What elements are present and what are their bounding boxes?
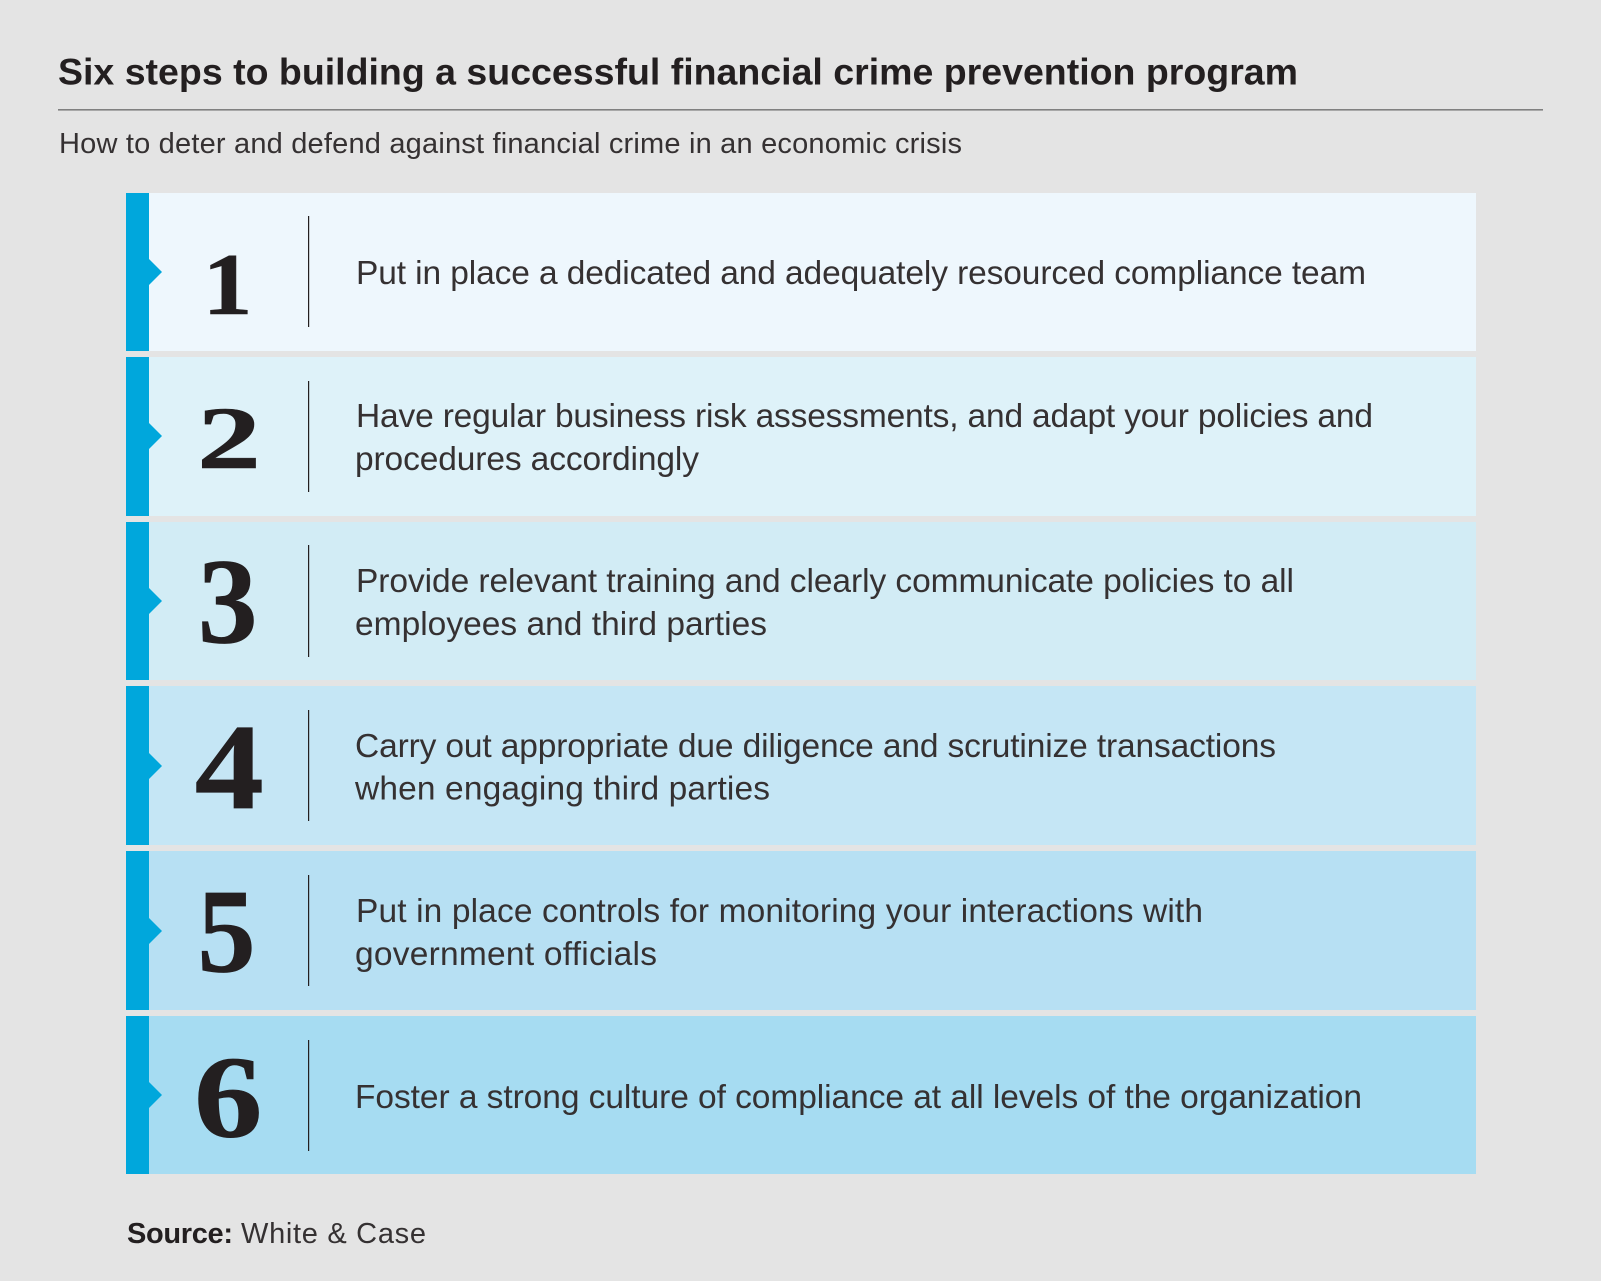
icon: blue marker with arrow, step 3 <box>126 522 162 680</box>
icon: blue marker with arrow, step 1 <box>126 193 162 351</box>
step 5 text: Put in place controls for monitoring your interactions with <box>356 893 1203 930</box>
number 6: 6 <box>194 1032 262 1162</box>
number 3: 3 <box>198 535 257 670</box>
step 3 text <box>355 563 1294 643</box>
step 2 text: Have regular business risk assessments, and adapt your policies and <box>356 398 1373 435</box>
number 5: 5 <box>198 865 255 998</box>
icon: blue marker with arrow, step 6 <box>126 1016 162 1174</box>
step 3 text: Provide relevant training and clearly communicate policies to all <box>356 563 1294 600</box>
step 1 text: Put in place a dedicated and adequately resourced compliance team <box>356 255 1366 292</box>
number 1: 1 <box>202 236 252 334</box>
subtitle: How to deter and defend against financial crime in an economic crisis <box>59 128 962 160</box>
step 2 text: procedures accordingly <box>355 441 699 478</box>
panel: step 1 <box>126 193 1476 351</box>
number 2: 2 <box>197 389 261 487</box>
icon: blue marker with arrow, step 2 <box>126 357 162 516</box>
source note: Source: <box>127 1218 233 1250</box>
panel: step 4 <box>126 686 1476 845</box>
source note <box>127 1218 426 1250</box>
step 4 text: Carry out appropriate due diligence and scrutinize transactions <box>355 728 1276 765</box>
step 5 text <box>355 893 1203 973</box>
step 2 text <box>355 398 1373 478</box>
title: Six steps to building a successful financial crime prevention program <box>58 50 1298 92</box>
step 3 text: employees and third parties <box>355 606 767 643</box>
step 4 text <box>354 728 1276 808</box>
panel: step 2 <box>126 357 1476 516</box>
step 5 text: government officials <box>355 936 657 973</box>
icon: blue marker with arrow, step 5 <box>126 851 162 1010</box>
step 6 text: Foster a strong culture of compliance at all levels of the organization <box>355 1079 1362 1116</box>
step 4 text: when engaging third parties <box>354 770 770 808</box>
panel: step 5 <box>126 851 1476 1010</box>
icon: blue marker with arrow, step 4 <box>126 686 162 845</box>
number 4: 4 <box>195 700 264 835</box>
panel: step 6 <box>126 1016 1476 1174</box>
source note: White & Case <box>241 1218 426 1250</box>
panel: step 3 <box>126 522 1476 680</box>
